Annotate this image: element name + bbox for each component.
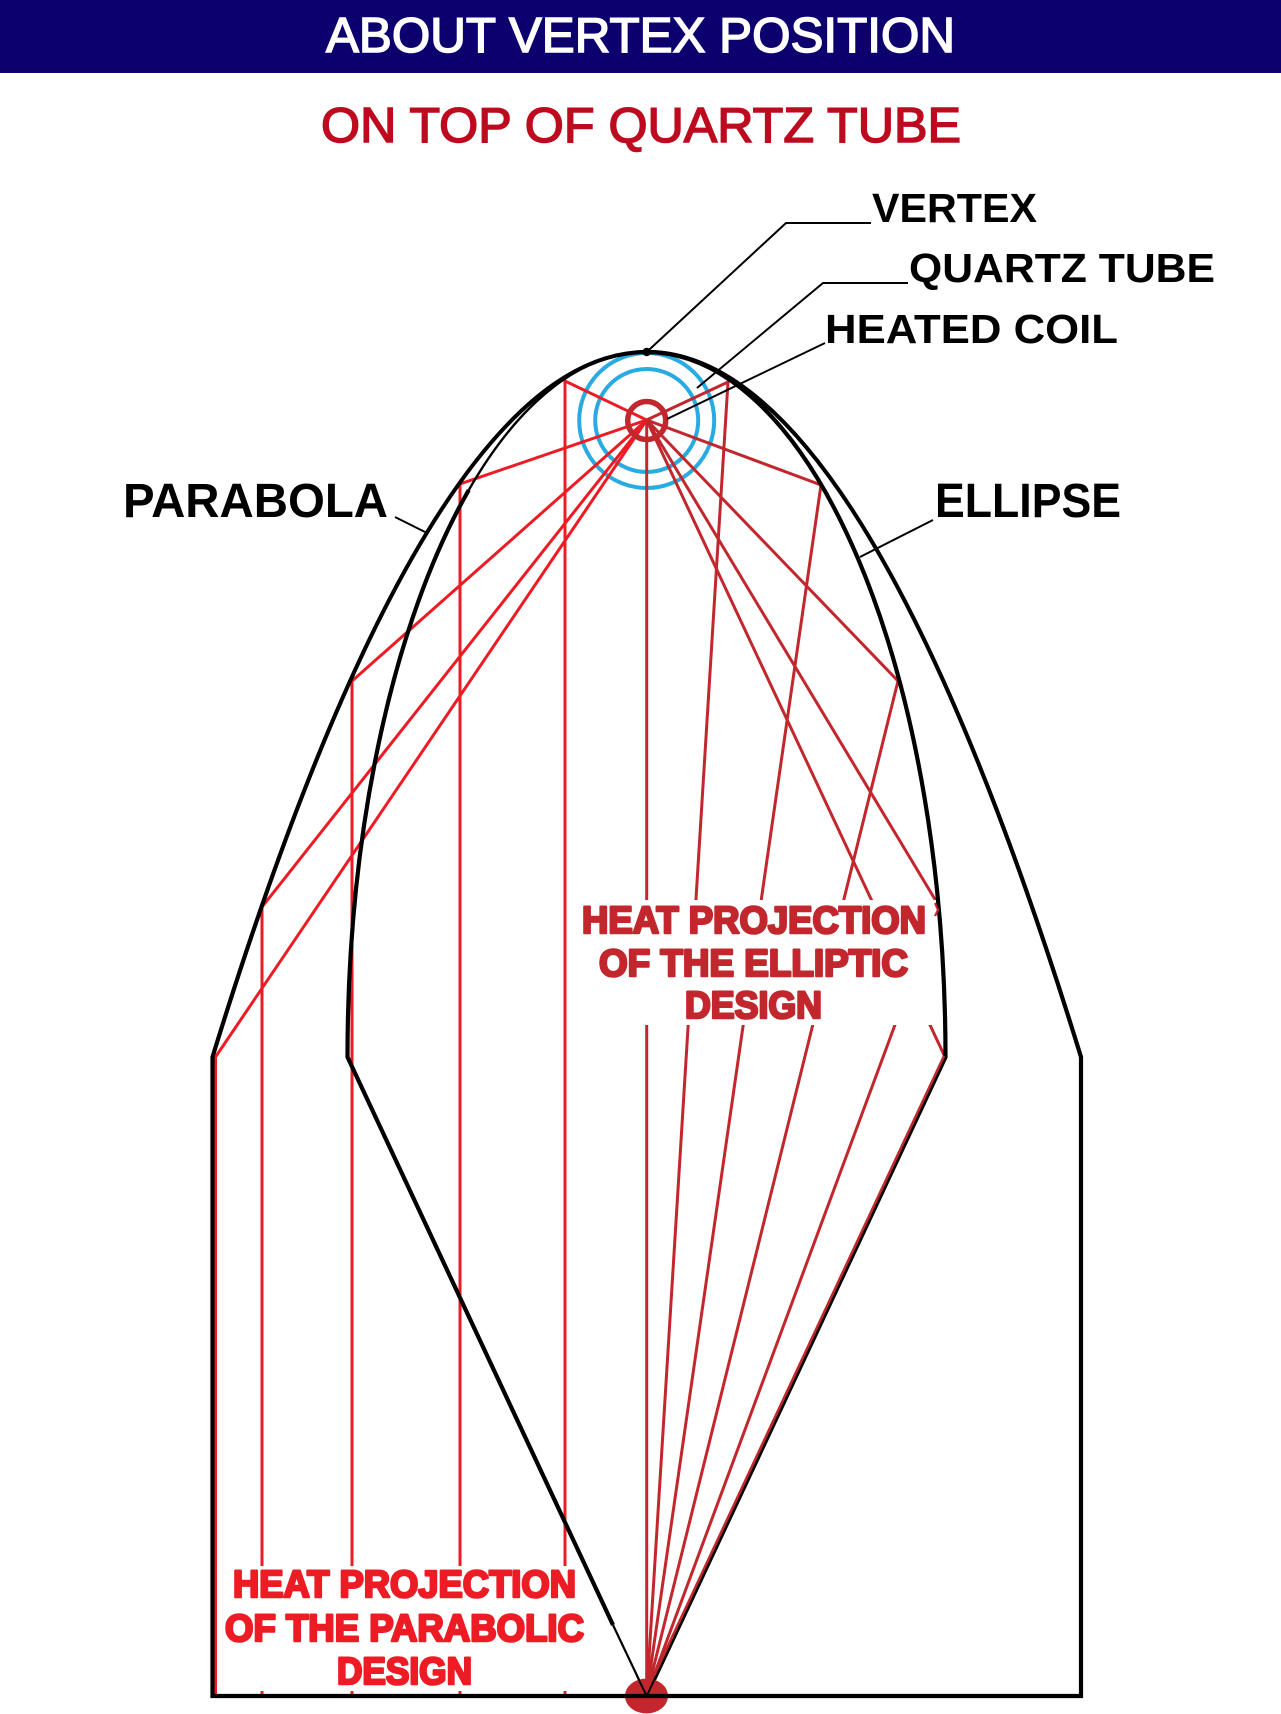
elliptic heat rays <box>647 382 945 1695</box>
subtitle: ON TOP OF QUARTZ TUBE <box>321 99 961 153</box>
title banner: ABOUT VERTEX POSITION <box>326 9 955 63</box>
elliptic design caption <box>582 900 926 1027</box>
vertex label with leader: VERTEX <box>872 185 1037 231</box>
quartz tube label with leader <box>697 245 1215 388</box>
parabola label with leader: PARABOLA <box>123 475 388 528</box>
small ray tip beside caption <box>935 903 938 916</box>
parabolic design caption: HEAT PROJECTION <box>233 1564 576 1606</box>
parabolic heat rays <box>216 381 647 1696</box>
heated coil <box>628 402 666 440</box>
quartz tube label with leader: QUARTZ TUBE <box>909 245 1215 291</box>
focal point <box>625 1676 668 1714</box>
quartz tube circles <box>579 353 714 488</box>
parabolic design caption: OF THE PARABOLIC <box>225 1608 584 1650</box>
parabola reflector outline <box>212 352 1081 1696</box>
title banner <box>0 0 1281 73</box>
elliptic design caption: OF THE ELLIPTIC <box>599 943 908 985</box>
ellipse reflector outline <box>348 352 946 1696</box>
elliptic design caption: DESIGN <box>685 985 822 1027</box>
heated coil label with leader: HEATED COIL <box>825 306 1118 352</box>
heated coil label with leader <box>667 306 1118 419</box>
parabolic design caption: DESIGN <box>337 1651 472 1693</box>
elliptic design caption: HEAT PROJECTION <box>582 900 926 942</box>
ellipse label with leader: ELLIPSE <box>935 475 1121 528</box>
parabolic design caption <box>225 1564 584 1693</box>
focal ray along ellipse edge <box>646 1056 944 1694</box>
vertex label with leader <box>642 185 1037 356</box>
ellipse label with leader <box>860 475 1121 557</box>
